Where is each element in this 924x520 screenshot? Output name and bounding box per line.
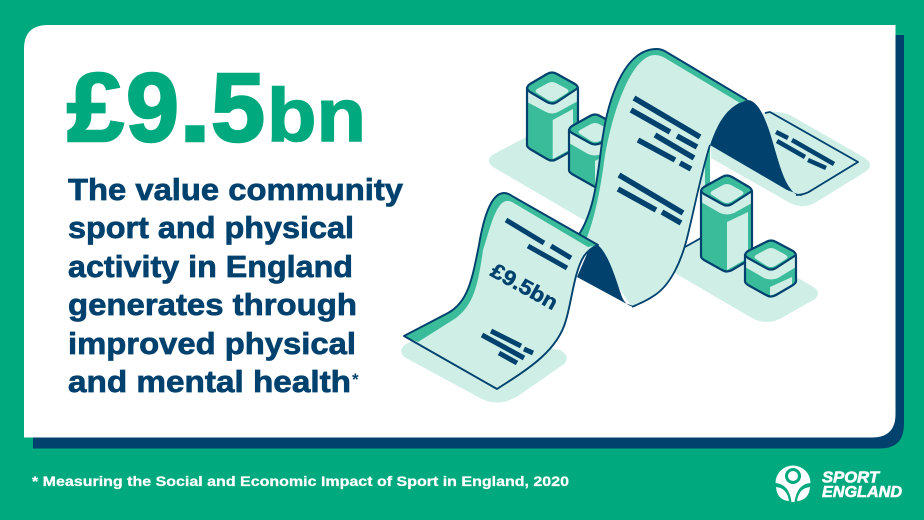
bin: short right [745,240,796,297]
text block: description: generates through [68,288,357,322]
heading: £9.5bn: bn [267,73,366,157]
text block: description: improved physical [68,327,356,361]
receipt: middle sheet [578,49,747,307]
receipt: back fold [710,100,803,196]
logo wordmark: SPORT [822,470,880,486]
receipt: front sheet [404,193,598,389]
text block: description: activity in England [68,250,353,284]
bin: back left [527,72,578,161]
heading: £9.5bn: 5 [211,53,265,162]
bin: tall right [701,176,752,272]
receipt: front fold [577,245,636,307]
text block: description [68,173,403,399]
platform: front [401,332,567,403]
text block: description: The value community [68,173,403,207]
logo: Sport England [776,466,902,502]
heading: £9.5bn [67,53,366,162]
heading: £9.5bn: £ [67,53,124,162]
text block: description: and mental health [68,365,351,399]
heading: £9.5bn: 9 [126,53,179,162]
panel: white card [24,25,896,438]
platform: back right [711,112,870,206]
receipt amount: £9.5bn [487,259,562,315]
bin: back small [569,114,622,190]
panel shadow [33,35,904,448]
footnote: * Measuring the Social and Economic Impact of Sport in England, 2020 [32,473,569,489]
icon: figure [776,466,810,502]
receipt: back panel [765,112,858,195]
text block: description: sport and physical [68,211,354,245]
heading: £9.5bn: . [179,53,211,162]
text block: description: * [352,370,359,389]
receipt: fold underside stripe [694,150,705,190]
illustration: receipt and bins [401,49,870,403]
logo: Sport England: ENGLAND [822,484,902,501]
platform: left and lower bins [489,122,818,322]
